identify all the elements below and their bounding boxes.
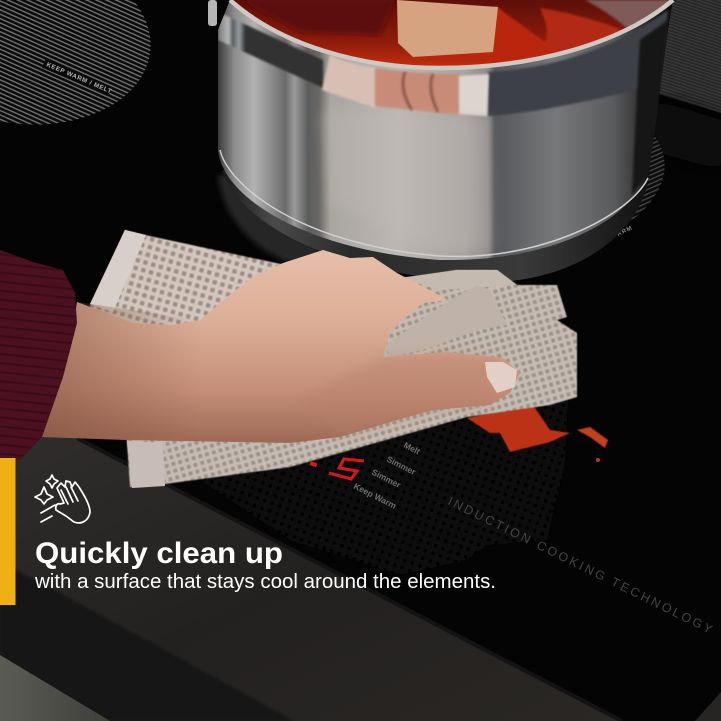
pan reflection on glass [218,175,330,270]
upper left reflection band [218,12,323,88]
counter front face [0,562,294,721]
top right glass shade [650,100,721,170]
reflected towel right [459,74,489,116]
upper right dark reflection [488,10,668,116]
icon: clean hand with sparkles [35,475,90,523]
counter corner light [0,655,110,721]
pan seam line [220,150,648,257]
pan rim [230,0,673,68]
control labels [352,440,422,511]
left burner ring marking [0,0,159,137]
towel lower body [126,270,577,487]
label keep warm: Keep Warm [352,481,398,511]
sauce on spoon [437,4,559,58]
sauce and spoon [225,0,675,70]
wooden spoon [397,0,498,57]
towel upper left [90,230,290,360]
digit five [329,459,364,479]
motion lines [41,505,55,522]
label simmer: Simmer [385,454,418,477]
towel fold [385,285,507,358]
hand outline [56,481,90,523]
title: Quickly clean up [35,537,283,570]
display number [309,459,364,479]
mid reflection fade [320,110,495,250]
brand line on glass: INDUCTION COOKING TECHNOLOGY [446,494,715,637]
burner label backing [42,59,112,96]
towel reflection on glass [200,400,568,575]
sleeve [0,250,77,460]
pan body [218,0,673,260]
towel upper hem [90,230,146,312]
reflected fingers [375,68,460,115]
burner label: ARM [616,225,634,238]
finger creases [403,72,438,112]
thumb shade [300,352,503,437]
thumb nail [485,362,517,393]
digit dot [309,461,317,467]
pan handle rivet [208,0,217,26]
label simmer low: Simmer [370,467,403,490]
tomato sauce smear [467,405,608,462]
right burner ring marking [618,137,664,236]
sauce drop [596,458,600,462]
forearm shade [42,302,200,442]
pan reflections [218,10,668,250]
finger lines [61,487,78,504]
right edge dark reflection [632,20,668,195]
towel [90,230,577,488]
burner label: KEEP WARM / MELT [45,61,113,95]
subtitle: with a surface that stays cool around the elements. [34,571,496,593]
label melt: Melt [402,440,422,457]
accent bar [0,458,16,605]
large sparkle [35,487,53,504]
small sparkle [46,475,58,488]
bright sauce right [540,7,622,52]
dark sauce left [256,6,392,38]
hand and forearm [42,250,520,443]
towel lower hem [127,441,165,488]
pan base [222,170,650,282]
counter top [0,430,622,721]
reflected towel left [322,55,376,108]
bottom right counter corner [695,692,721,721]
pan inner wall [585,0,670,28]
top right striped panel [655,0,721,113]
sauce [225,0,675,70]
cooktop edge [77,438,622,721]
saucepan [208,0,675,282]
sauce drip [577,427,608,448]
towel flat top [400,270,517,290]
